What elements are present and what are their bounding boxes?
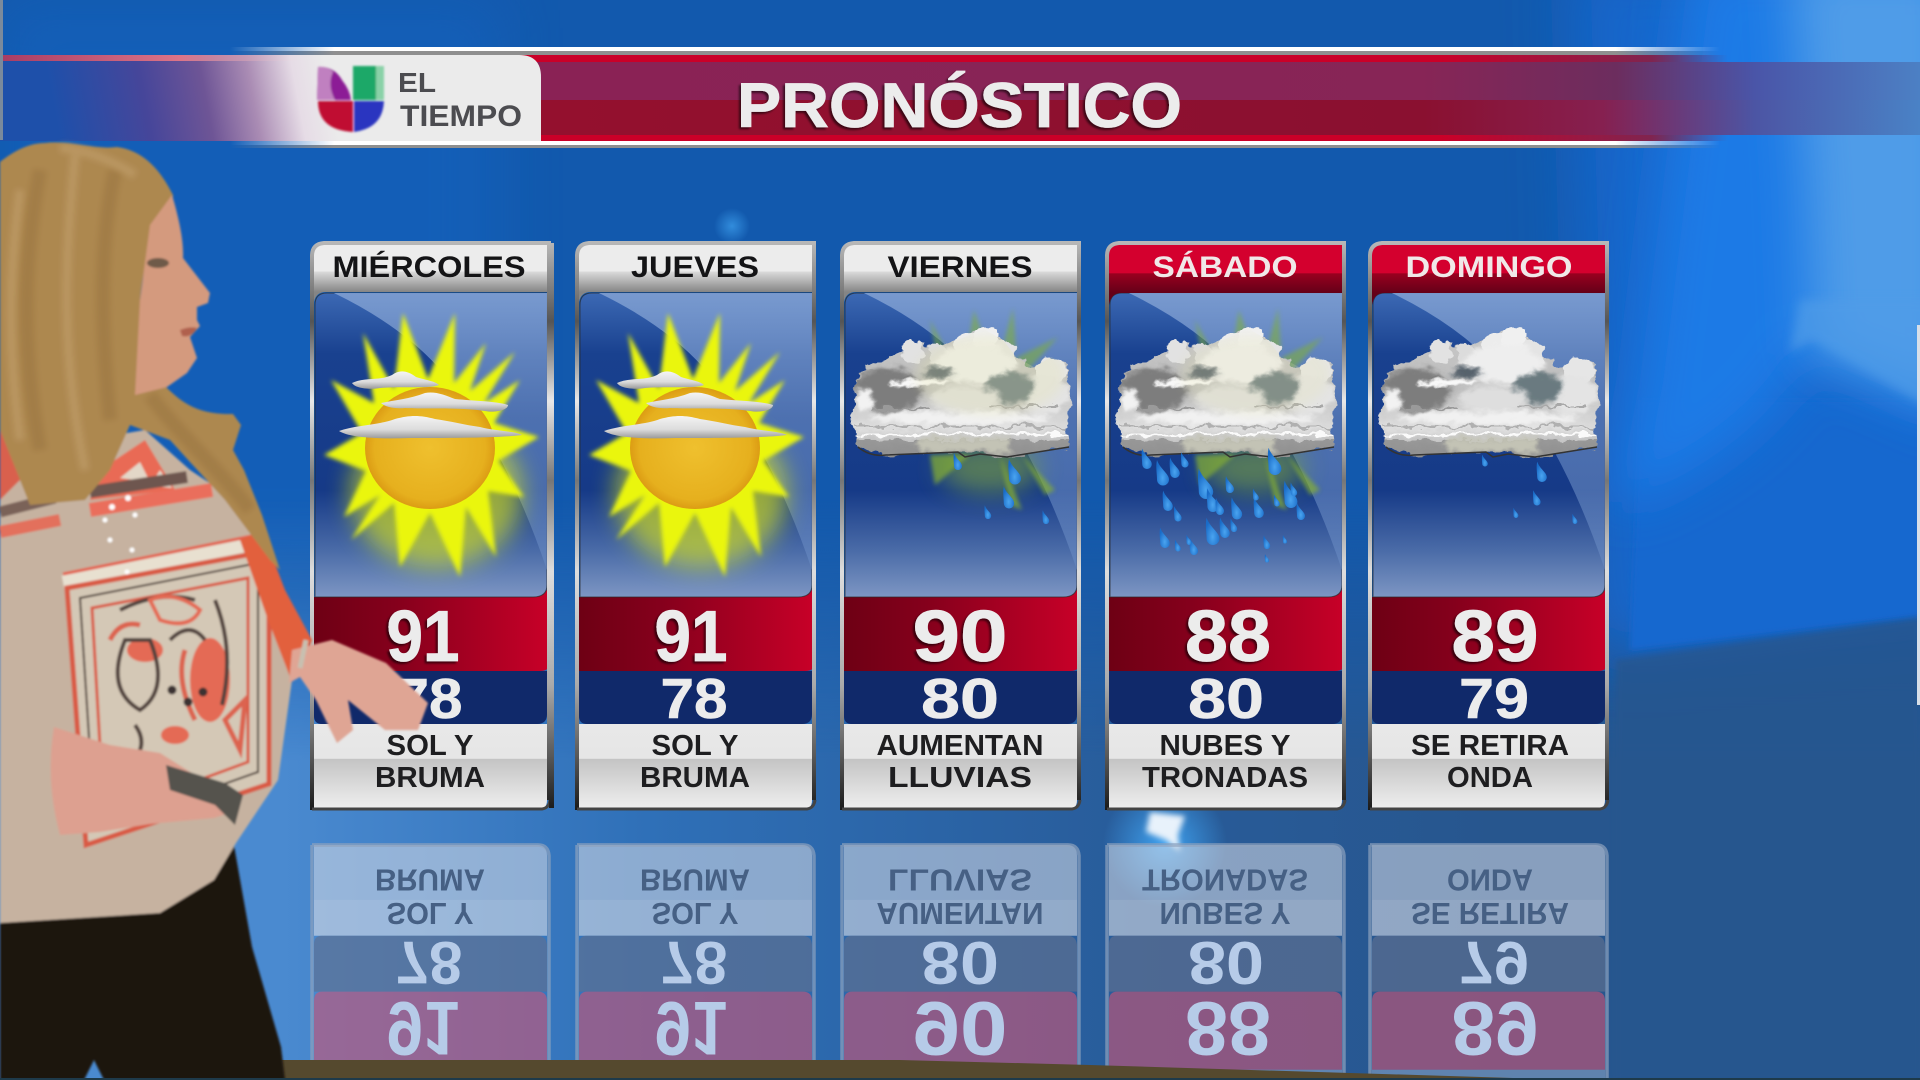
condition text: NUBES Y — [1160, 730, 1290, 762]
logo text: el tiempo — [398, 67, 522, 133]
reflection card: sábado: TRONADAS — [1142, 862, 1308, 896]
icon: cloud with light rain — [1379, 327, 1598, 524]
reflection card: viernes: LLUVIAS — [888, 862, 1032, 896]
presenter hand with remote — [51, 727, 232, 835]
icon: univision logo — [317, 66, 384, 132]
presenter pointing hand — [289, 640, 428, 743]
condition text — [1142, 730, 1308, 794]
panel: viernes — [842, 243, 1080, 810]
hair highlights — [11, 148, 135, 470]
condition text: ONDA — [1447, 762, 1533, 794]
condition text: AUMENTAN — [876, 730, 1044, 762]
reflection card: miércoles: 78 — [396, 929, 463, 995]
condition text — [1411, 730, 1569, 794]
reflection card: miércoles: 91 — [386, 986, 460, 1071]
blouse pattern — [0, 430, 269, 845]
presenter face — [135, 195, 210, 395]
day heading: MIÉRCOLES — [332, 250, 526, 284]
reflection card: domingo: 89 — [1452, 986, 1538, 1071]
icon: sun with clouds — [589, 313, 804, 577]
reflection card: sábado: 88 — [1185, 986, 1271, 1071]
face details — [147, 258, 197, 336]
condition text — [876, 730, 1044, 794]
low temperature: 78 — [660, 667, 728, 731]
high temperature: 89 — [1452, 597, 1538, 677]
reflections of forecast cards — [312, 845, 1607, 1080]
presenter — [0, 142, 428, 1080]
condition text: SOL Y — [652, 730, 738, 762]
banner red stripes — [0, 55, 1920, 141]
reflection card: miércoles: SOL Y — [387, 896, 474, 930]
condition text — [375, 730, 485, 794]
banner bottom chrome — [230, 141, 1720, 148]
high temperature: 90 — [912, 597, 1008, 677]
presenter hair — [0, 142, 280, 570]
day heading: DOMINGO — [1406, 251, 1572, 284]
icon: sun with clouds — [324, 313, 539, 577]
remote control — [166, 765, 243, 825]
floor — [270, 1060, 1513, 1080]
day heading: VIERNES — [888, 251, 1032, 284]
reflection card: jueves: 91 — [654, 986, 728, 1071]
reflection card: sábado: NUBES Y — [1160, 896, 1291, 930]
high temperature: 88 — [1185, 597, 1271, 677]
condition text: BRUMA — [375, 762, 485, 794]
condition text: TRONADAS — [1142, 762, 1308, 794]
reflection card: domingo: ONDA — [1447, 862, 1533, 896]
logo text: el tiempo: TIEMPO — [400, 100, 522, 133]
panel: jueves — [577, 243, 815, 810]
presenter trousers — [0, 840, 285, 1080]
icon: cloud with sun and heavy rain — [1116, 308, 1335, 562]
low temperature: 80 — [1188, 667, 1264, 731]
reflection card: domingo: 79 — [1459, 929, 1529, 995]
panel: sábado — [1107, 243, 1345, 810]
title: PRONÓSTICO — [737, 71, 1182, 141]
logo panel — [0, 55, 541, 141]
condition text: LLUVIAS — [888, 762, 1032, 794]
faint pink line left — [0, 55, 300, 61]
panel: domingo — [1370, 243, 1608, 810]
reflection card: jueves: 78 — [661, 929, 728, 995]
low temperature: 79 — [1459, 667, 1529, 731]
banner top chrome — [230, 47, 1720, 55]
day heading: JUEVES — [631, 251, 759, 284]
reflection card: viernes — [842, 845, 1079, 1080]
low temperature: 78 — [396, 667, 462, 731]
reflection card: jueves — [577, 845, 814, 1080]
logo text: el tiempo: EL — [398, 67, 436, 98]
panel: miércoles — [312, 243, 554, 810]
reflection card: jueves: BRUMA — [640, 862, 750, 896]
high temperature: 91 — [386, 597, 460, 677]
reflection card: domingo: SE RETIRA — [1411, 896, 1569, 930]
reflection card: miércoles: BRUMA — [375, 862, 485, 896]
reflection card: domingo — [1370, 845, 1607, 1080]
reflection card: jueves: SOL Y — [652, 896, 739, 930]
bracelet — [300, 640, 306, 668]
condition text — [640, 730, 750, 794]
presenter sleeve — [240, 530, 312, 682]
hair shading — [27, 170, 250, 510]
icon: cloud with sun and light rain — [851, 308, 1070, 524]
high temperature: 91 — [654, 597, 728, 677]
condition text: BRUMA — [640, 762, 750, 794]
low temperature: 80 — [921, 667, 999, 731]
condition text: SOL Y — [386, 730, 474, 762]
condition text: SE RETIRA — [1411, 730, 1569, 762]
banner upper band — [0, 62, 1920, 100]
day heading: SÁBADO — [1152, 250, 1298, 284]
reflection card: viernes: 80 — [921, 929, 999, 995]
reflection card: viernes: 90 — [912, 986, 1008, 1071]
presenter blouse — [0, 430, 292, 923]
reflection card: sábado: 80 — [1188, 929, 1264, 995]
banner — [0, 47, 1920, 148]
banner lower band — [0, 100, 1920, 135]
reflection card: miércoles — [312, 845, 549, 1080]
reflection card: viernes: AUMENTAN — [876, 896, 1044, 930]
reflection card: sábado — [1107, 845, 1344, 1080]
